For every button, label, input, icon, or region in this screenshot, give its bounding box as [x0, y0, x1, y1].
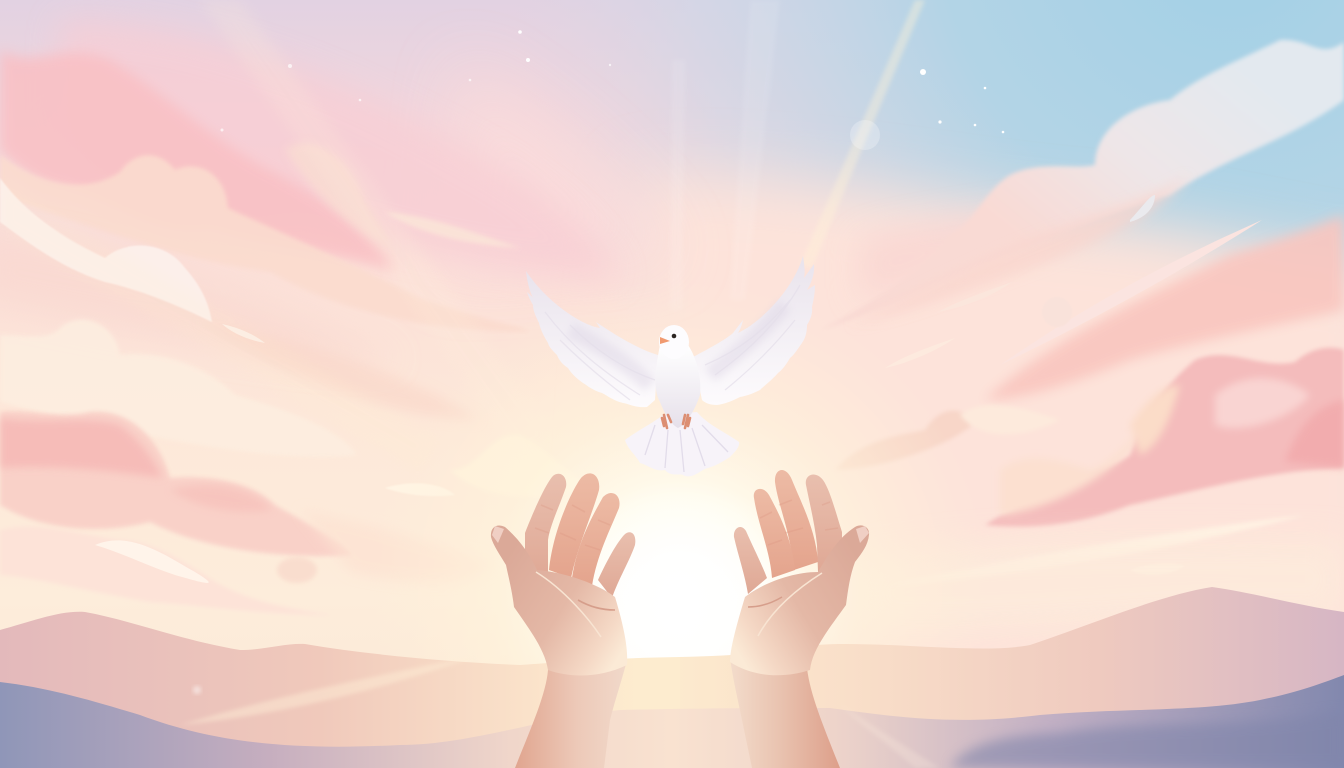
clouds: right pink streak — [885, 215, 1344, 400]
light streaks on hills — [180, 655, 940, 768]
left forearm — [515, 660, 627, 768]
cloud: left white wisp — [0, 178, 265, 343]
clouds: right pink bank — [985, 348, 1344, 527]
dove feet — [662, 415, 690, 428]
clouds: right middle cream — [835, 405, 1344, 632]
dove beak — [660, 337, 670, 344]
cloud: centre low cream — [300, 435, 590, 583]
dove — [526, 256, 815, 476]
right forearm — [730, 658, 840, 768]
mountains: back right — [680, 587, 1344, 768]
sparkles — [220, 30, 1004, 133]
dove head — [659, 325, 689, 359]
cloud: lower left wisp — [0, 527, 335, 615]
dove eye — [672, 334, 676, 338]
dove right wing — [693, 256, 815, 405]
right palm — [730, 525, 869, 675]
left fingers — [525, 473, 635, 598]
right fingers — [734, 470, 842, 594]
sun rays — [0, 0, 925, 470]
right hand — [730, 470, 869, 768]
dove body — [655, 345, 700, 428]
dove tail — [625, 412, 739, 476]
dove left wing — [526, 271, 658, 407]
left palm — [491, 525, 627, 675]
clouds: upper right white — [820, 40, 1344, 330]
mountains: back left — [0, 612, 680, 768]
clouds: upper left pink — [0, 20, 620, 332]
cloud: left pink bank — [0, 411, 352, 583]
cloud: left cream bank — [0, 319, 357, 457]
mountains: front range — [0, 675, 1344, 768]
left hand — [491, 473, 635, 768]
sky: pink bands — [0, 205, 1060, 420]
